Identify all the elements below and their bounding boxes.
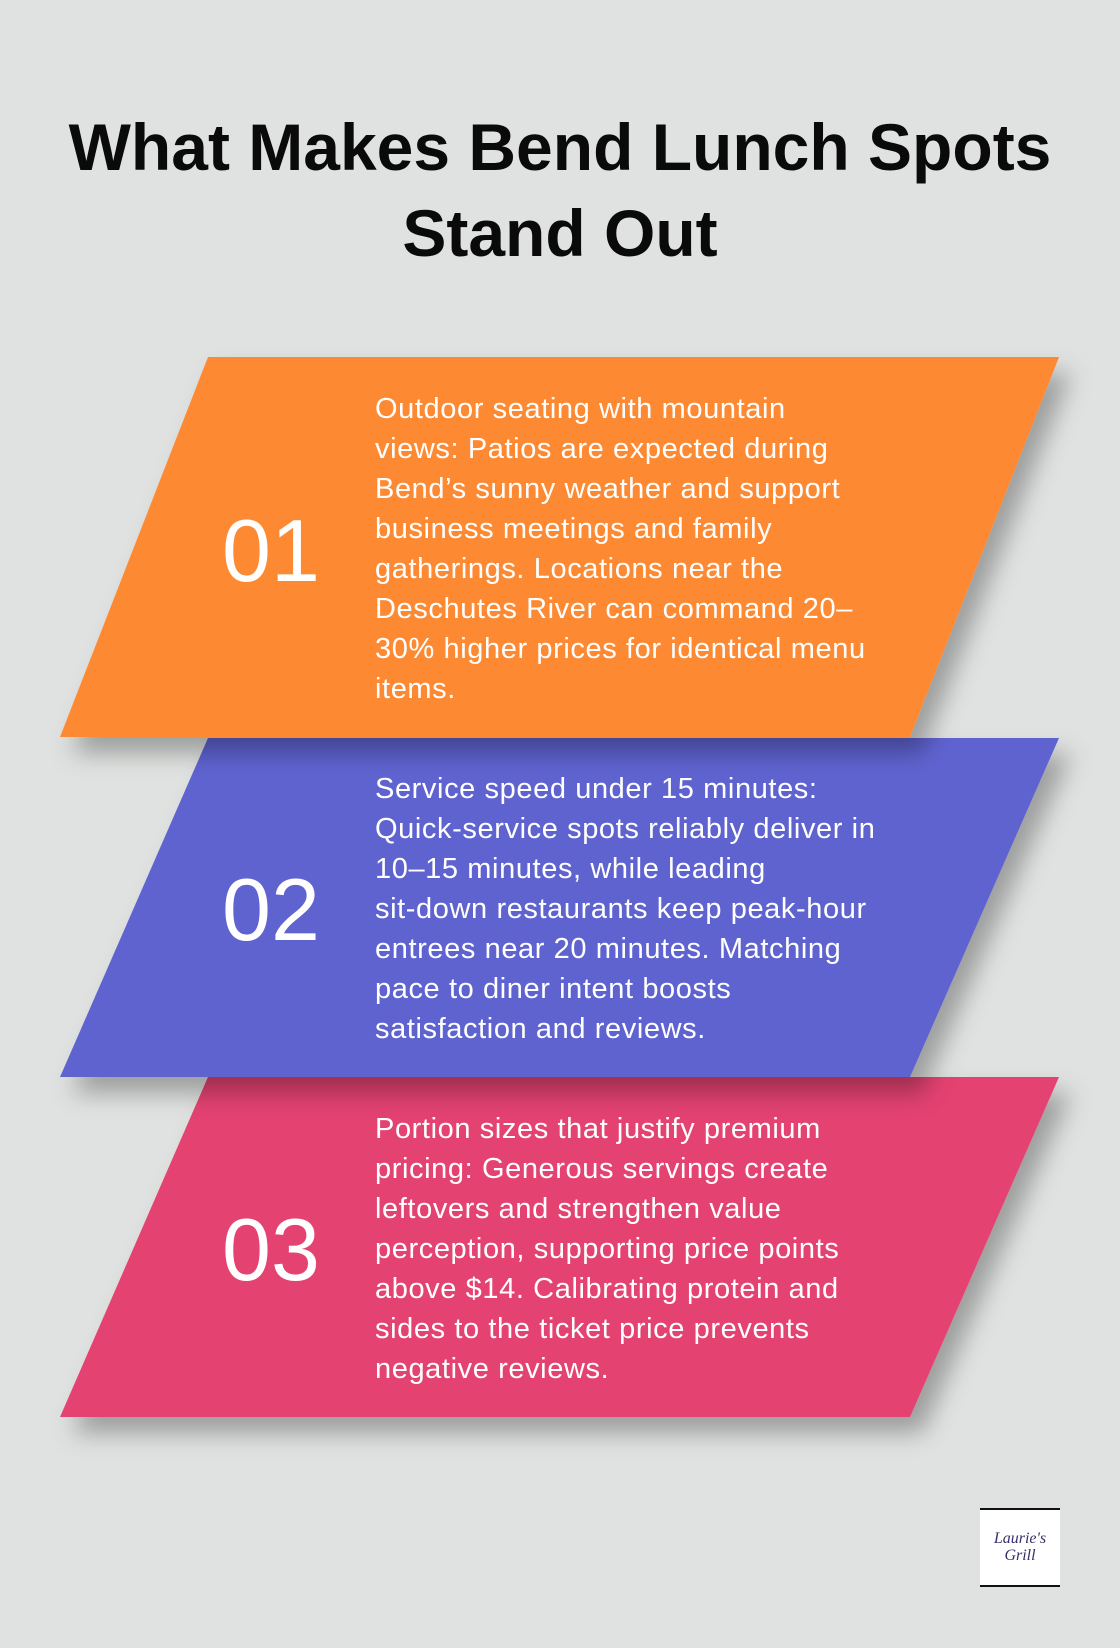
- panel 2 text: satisfaction and reviews.: [375, 1013, 706, 1045]
- panel 3 text: sides to the ticket price prevents: [375, 1313, 810, 1345]
- panel 2 shape: [60, 738, 1059, 1077]
- title: What Makes Bend Lunch Spots: [69, 110, 1051, 184]
- logo: Grill: [1004, 1547, 1036, 1564]
- panel 2 text: Quick-service spots reliably deliver in: [375, 813, 875, 845]
- panel 3 text: Portion sizes that justify premium: [375, 1113, 821, 1145]
- logo: [980, 1508, 1060, 1587]
- panel 3 text: leftovers and strengthen value: [375, 1193, 782, 1225]
- panel 1 text: [375, 393, 866, 705]
- panel 1 text: Outdoor seating with mountain: [375, 393, 786, 425]
- panel 1 text: business meetings and family: [375, 513, 772, 545]
- panel 3 text: above $14. Calibrating protein and: [375, 1273, 839, 1305]
- panel 2 text: entrees near 20 minutes. Matching: [375, 933, 841, 965]
- panel 1 text: views: Patios are expected during: [375, 433, 828, 465]
- panel 1 text: Deschutes River can command 20–: [375, 593, 853, 625]
- panel 3 text: pricing: Generous servings create: [375, 1153, 828, 1185]
- panel 2 text: Service speed under 15 minutes:: [375, 773, 818, 805]
- panel 2 text: pace to diner intent boosts: [375, 973, 731, 1005]
- panel 3 text: perception, supporting price points: [375, 1233, 839, 1265]
- panel 3 text: [375, 1113, 839, 1385]
- panel 1 shape: [60, 357, 1059, 737]
- panel 2 number: 02: [222, 860, 320, 959]
- panel 2 text: [375, 773, 875, 1045]
- panel 2 text: 10–15 minutes, while leading: [375, 853, 766, 885]
- panel 2 text: sit-down restaurants keep peak-hour: [375, 893, 867, 925]
- panel 1 text: gatherings. Locations near the: [375, 553, 783, 585]
- panel 1 number: 01: [222, 501, 320, 600]
- title: Stand Out: [402, 196, 718, 270]
- panel 1 text: 30% higher prices for identical menu: [375, 633, 866, 665]
- panel 3 shape: [60, 1077, 1059, 1417]
- title: [68, 110, 1051, 270]
- panel 1 text: Bend’s sunny weather and support: [375, 473, 840, 505]
- logo: Laurie's: [994, 1530, 1046, 1547]
- panel 3 text: negative reviews.: [375, 1353, 609, 1385]
- panel 3 number: 03: [222, 1200, 320, 1299]
- panel 1 text: items.: [375, 673, 456, 705]
